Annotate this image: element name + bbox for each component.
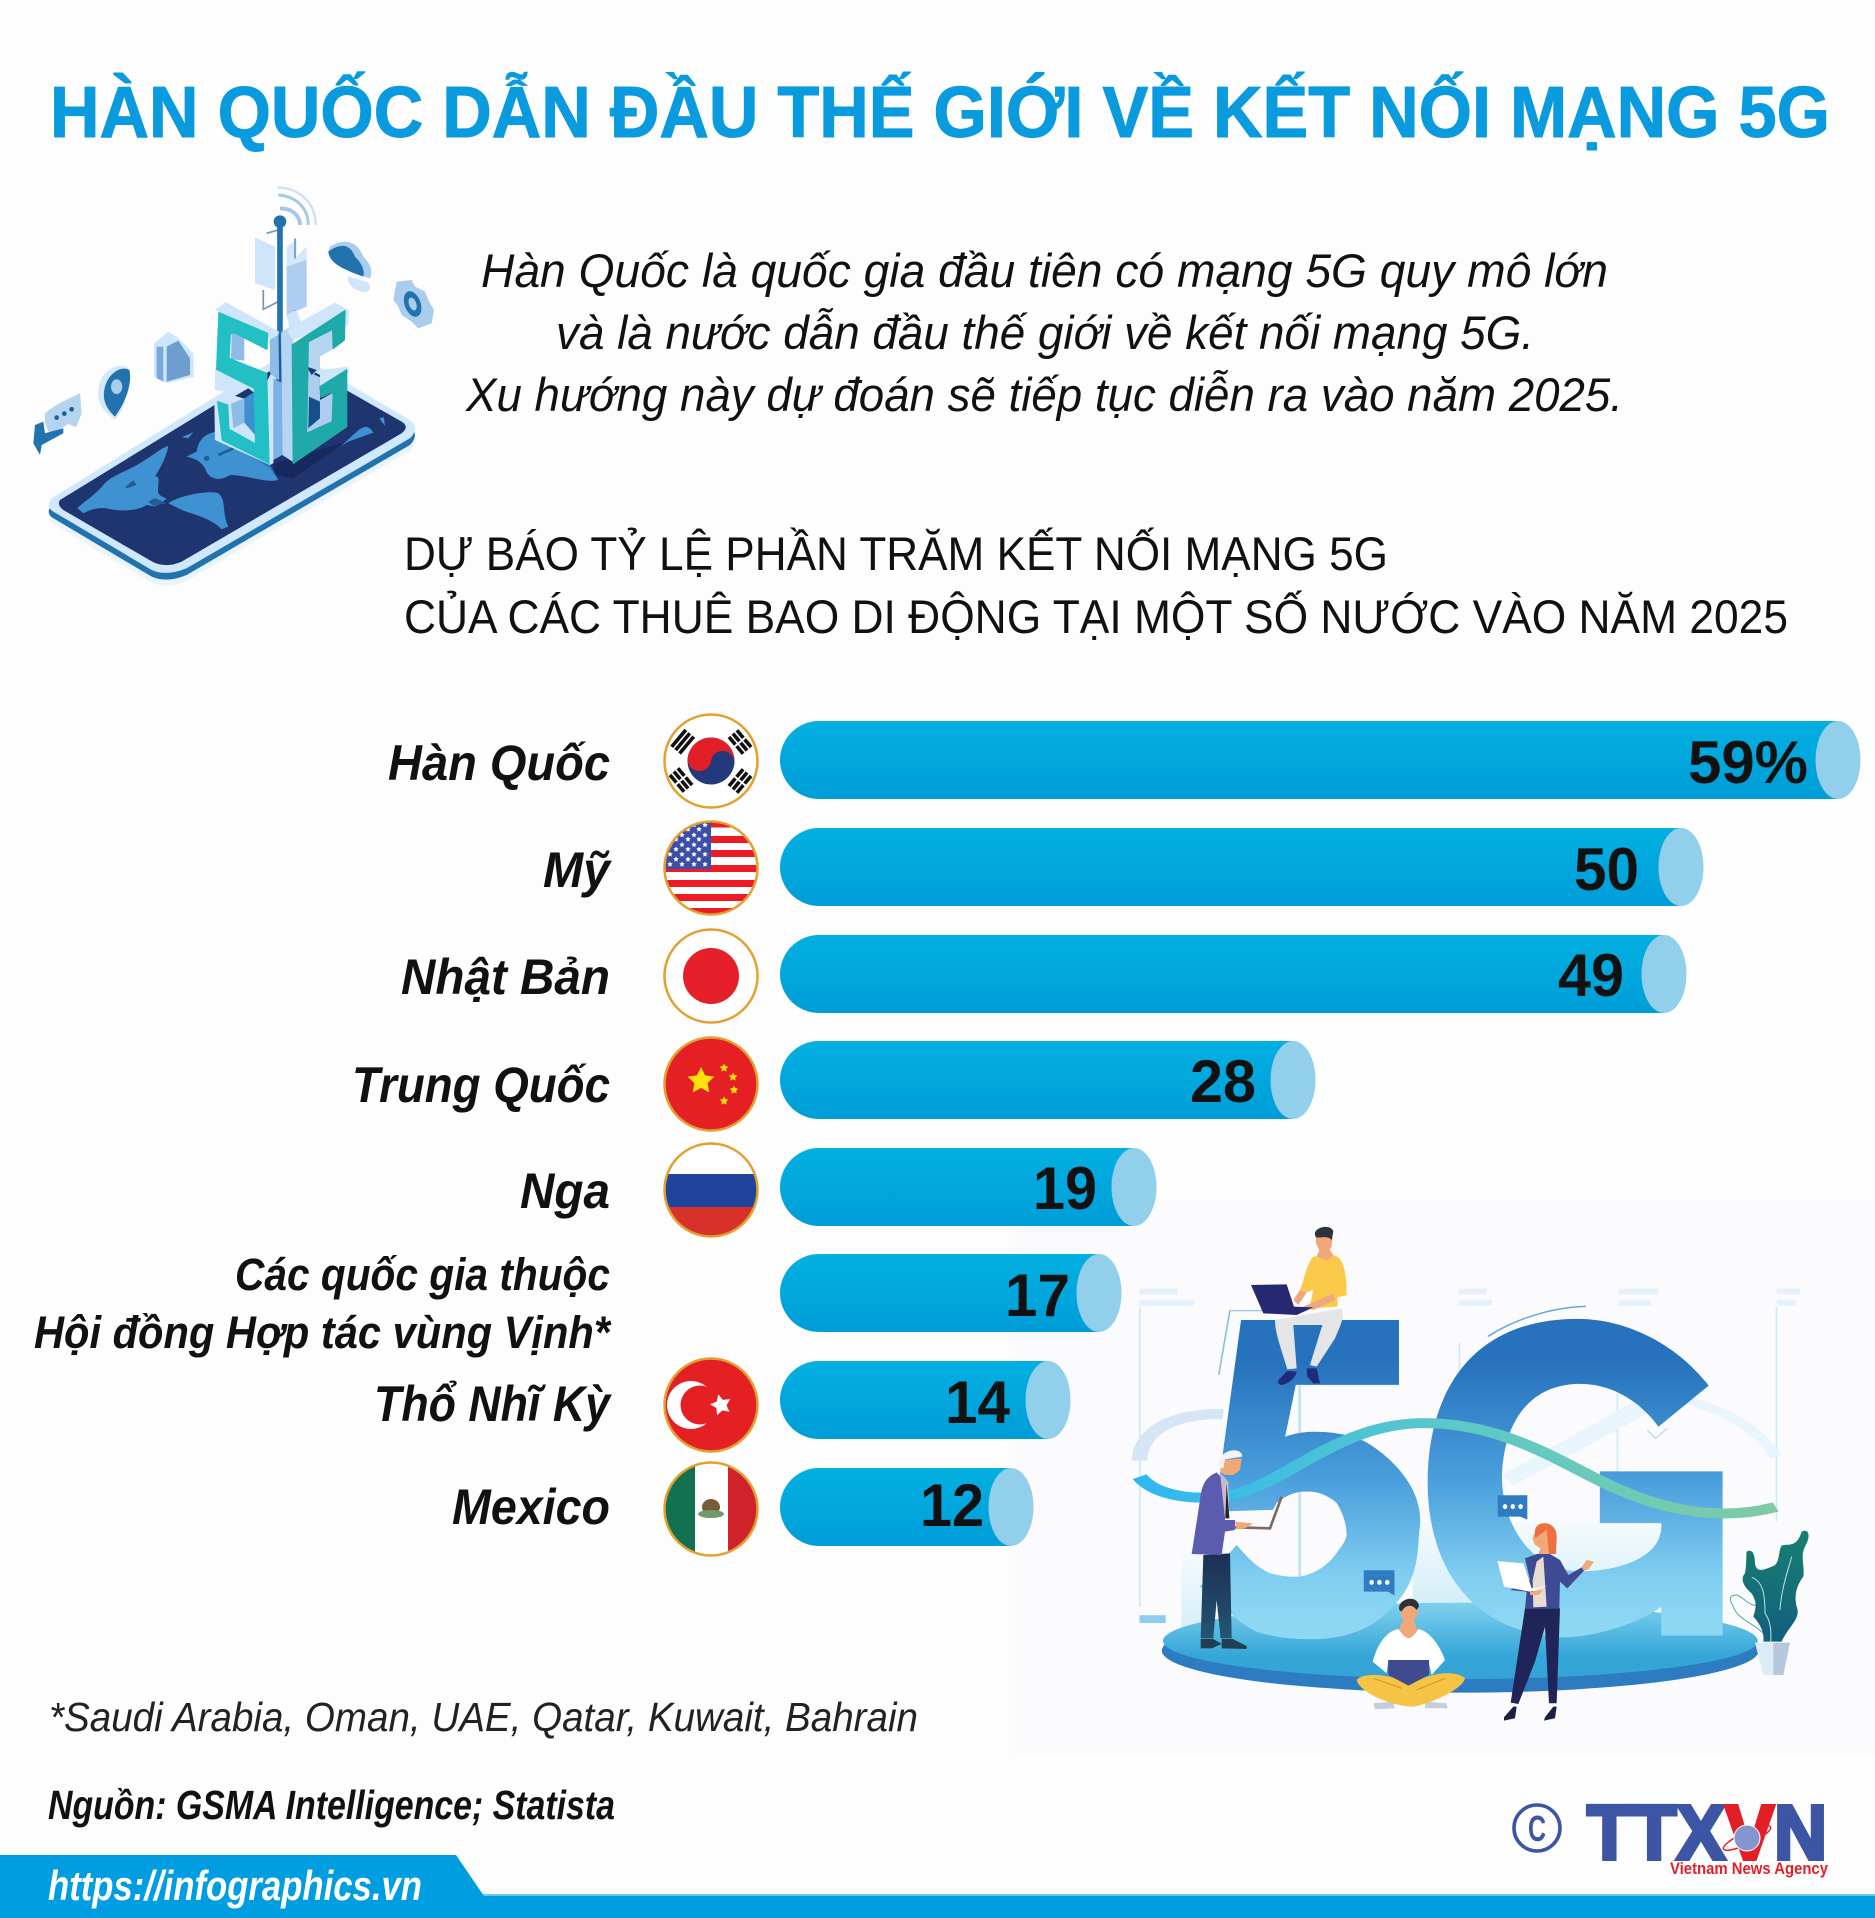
row: Nga: Nga — [520, 1163, 610, 1219]
5G letters — [214, 302, 349, 465]
woman presenting — [1497, 1523, 1594, 1721]
platform — [1162, 1603, 1759, 1693]
antenna — [255, 215, 307, 333]
phone body — [49, 350, 415, 586]
chart heading: DỰ BÁO TỶ LỆ PHẦN TRĂM KẾT NỐI MẠNG 5G — [404, 527, 1388, 580]
icon: folder block — [154, 332, 194, 383]
bar chart — [34, 714, 1860, 1556]
icon: gear — [393, 280, 434, 328]
row: Các quốc gia thuộc Hội đồng Hợp tác vùng Vịnh — [34, 1249, 1122, 1358]
icon: map pin — [98, 366, 130, 420]
title: HÀN QUỐC DẪN ĐẦU THẾ GIỚI VỀ KẾT NỐI MẠNG 5G — [50, 71, 1830, 153]
flag: Japan — [664, 929, 758, 1023]
S face — [217, 313, 269, 463]
intro text: và là nước dẫn đầu thế giới về kết nối mạng 5G. — [556, 306, 1534, 359]
footer band — [0, 1855, 1875, 1918]
logo: TTXVN: Vietnam News Agency — [1670, 1859, 1828, 1878]
decorative frame — [1139, 1289, 1800, 1632]
flag: China — [664, 1037, 758, 1131]
flag: Russia — [664, 1143, 758, 1237]
plant — [1730, 1531, 1809, 1675]
row: Hàn Quốc — [388, 714, 1860, 808]
row: Các quốc gia thuộc Hội đồng Hợp tác vùng Vịnh: 17 — [1005, 1262, 1070, 1329]
man with laptop — [1192, 1450, 1282, 1649]
speech bubbles — [1364, 1495, 1527, 1596]
logo: TTXVN: TTXVN — [1587, 1790, 1827, 1876]
row: Nga: 19 — [1033, 1155, 1097, 1222]
depth of letters — [214, 302, 349, 465]
flag: USA — [664, 821, 758, 915]
footnote: *Saudi Arabia, Oman, UAE, Qatar, Kuwait, Bahrain — [49, 1694, 918, 1740]
row: Nhật Bản: Nhật Bản — [401, 949, 610, 1005]
row: Thổ Nhĩ Kỳ: 14 — [945, 1369, 1011, 1436]
row: Trung Quốc: 28 — [1190, 1048, 1256, 1115]
chart heading — [404, 527, 1788, 643]
big 5 — [1200, 1320, 1420, 1639]
flag: Mexico — [664, 1462, 758, 1556]
wifi arcs — [277, 187, 316, 225]
row: Trung Quốc — [352, 1037, 1316, 1131]
world map — [77, 417, 385, 529]
flag: Turkey — [664, 1358, 758, 1452]
row: Nga — [520, 1143, 1156, 1237]
man sitting cross-legged — [1357, 1599, 1465, 1709]
intro text — [465, 244, 1623, 421]
row: Nhật Bản — [401, 929, 1686, 1023]
person standing left and person seated — [1192, 1450, 1465, 1709]
row: Mỹ — [543, 821, 1704, 915]
logo: TTXVN: C — [1528, 1808, 1546, 1849]
row: Các quốc gia thuộc Hội đồng Hợp tác vùng Vịnh: Các quốc gia thuộc — [235, 1249, 610, 1300]
illustration: phone with 5G tower — [33, 187, 434, 586]
illustration: 5G letters and platform — [1139, 1289, 1800, 1693]
row: Mexico: Mexico — [452, 1479, 610, 1535]
big G — [1428, 1319, 1723, 1637]
woman and plant — [1497, 1523, 1809, 1721]
background tint behind illustration — [1015, 1200, 1875, 1755]
row: Thổ Nhĩ Kỳ — [374, 1358, 1070, 1452]
source: Nguồn: GSMA Intelligence; Statista — [48, 1782, 615, 1828]
website url: https://infographics.vn — [48, 1862, 422, 1909]
chart heading: CỦA CÁC THUÊ BAO DI ĐỘNG TẠI MỘT SỐ NƯỚC VÀO NĂM 2025 — [404, 590, 1788, 643]
row: Hàn Quốc: Hàn Quốc — [388, 735, 610, 791]
row: Mỹ: 50 — [1574, 836, 1639, 903]
flag: South Korea — [664, 714, 758, 808]
icon: cloud — [328, 242, 371, 292]
G face — [292, 311, 347, 463]
row: Nhật Bản: 49 — [1558, 942, 1624, 1009]
intro text: Xu hướng này dự đoán sẽ tiếp tục diễn ra vào năm 2025. — [465, 368, 1623, 421]
row: Các quốc gia thuộc Hội đồng Hợp tác vùng Vịnh: Hội đồng Hợp tác vùng Vịnh* — [34, 1307, 612, 1358]
row: Trung Quốc: Trung Quốc — [352, 1057, 610, 1113]
row: Mexico — [452, 1462, 1034, 1556]
row: Thổ Nhĩ Kỳ: Thổ Nhĩ Kỳ — [374, 1376, 612, 1432]
icon: chat bubbles — [33, 393, 82, 455]
row: Hàn Quốc: 59% — [1688, 729, 1808, 796]
person sitting on top of the 5 — [1251, 1227, 1347, 1385]
row: Mỹ: Mỹ — [543, 842, 612, 898]
row: Mexico: 12 — [920, 1472, 984, 1539]
intro text: Hàn Quốc là quốc gia đầu tiên có mạng 5G quy mô lớn — [481, 244, 1608, 297]
wave — [1140, 1423, 1776, 1513]
